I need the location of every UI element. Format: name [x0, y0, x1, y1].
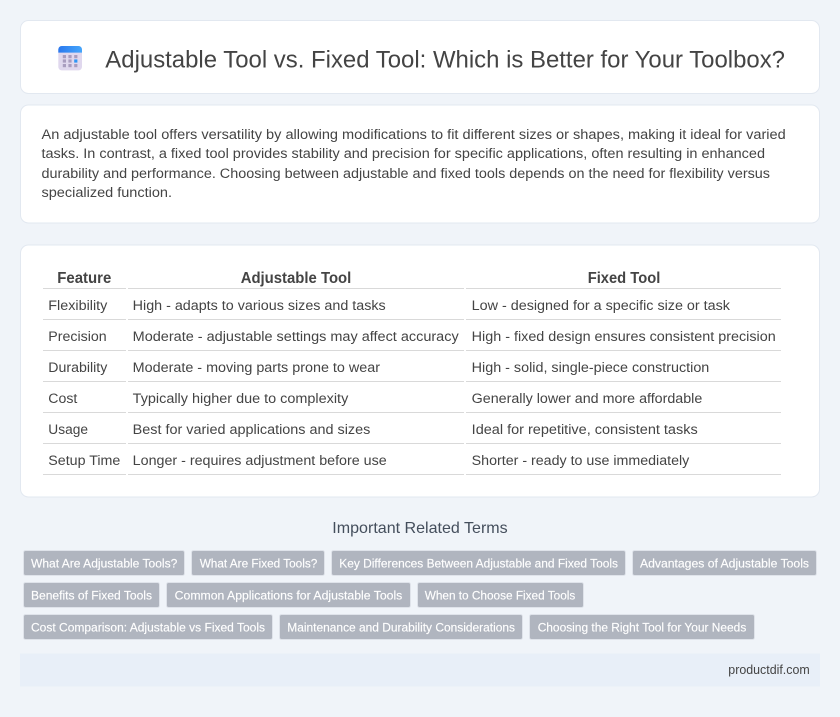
tag: [280, 614, 522, 640]
table header row: [43, 270, 781, 289]
table row: precision: Precision: [48, 329, 107, 345]
table row: setup time: Longer - requires adjustment before use: [133, 453, 387, 469]
tag: [24, 582, 160, 608]
panel: introduction: [20, 105, 820, 223]
table row: precision: High - fixed design ensures consistent precision: [472, 329, 776, 345]
text block: introduction paragraph: An adjustable tool offers versatility by allowing modifications to fit different sizes or shapes, making it ideal for varied: [42, 127, 786, 143]
table row: flexibility: [43, 298, 781, 320]
title: Adjustable Tool vs. Fixed Tool: Which is Better for Your Toolbox?: [105, 46, 785, 74]
table row: cost: [43, 391, 781, 413]
footer source text: productdif.com: [728, 662, 810, 677]
table row: usage: Usage: [48, 422, 88, 438]
table row: flexibility: High - adapts to various sizes and tasks: [133, 298, 386, 314]
table row: precision: [43, 329, 781, 351]
table row: durability: High - solid, single-piece construction: [472, 360, 709, 376]
icon: calendar: [58, 46, 82, 70]
panel: related term tags: [24, 550, 816, 640]
table row: usage: [43, 422, 781, 444]
table row: durability: Moderate - moving parts prone to wear: [133, 360, 380, 376]
table row: flexibility: Low - designed for a specific size or task: [472, 298, 731, 314]
tag: [192, 550, 324, 576]
table row: setup time: [43, 453, 781, 475]
tag: [332, 550, 626, 576]
tag: What Are Adjustable Tools?: [31, 556, 178, 570]
tag: [24, 614, 272, 640]
tag: [24, 550, 184, 576]
tag: Maintenance and Durability Considerations: [287, 620, 515, 634]
table row: usage: Ideal for repetitive, consistent tasks: [472, 422, 698, 438]
table row: durability: Durability: [48, 360, 108, 376]
tag: What Are Fixed Tools?: [200, 556, 318, 570]
text block: introduction paragraph: durability and performance. Choosing between adjustable and fixed tools depends on the need for flexibility versus: [42, 166, 770, 182]
tag: [632, 550, 816, 576]
tag: When to Choose Fixed Tools: [425, 588, 575, 602]
text block: introduction paragraph: tasks. In contrast, a fixed tool provides stability and precision for specific applications, often resulting in enhanced: [42, 146, 765, 162]
text block: introduction paragraph: specialized function.: [42, 185, 172, 201]
tag: Key Differences Between Adjustable and Fixed Tools: [339, 556, 618, 570]
tag: [530, 614, 754, 640]
tag: Choosing the Right Tool for Your Needs: [538, 620, 746, 634]
table row: cost: Cost: [48, 391, 77, 407]
tag: Advantages of Adjustable Tools: [640, 556, 809, 570]
tag: [166, 582, 410, 608]
heading: important related terms: Important Related Terms: [332, 520, 508, 537]
table row: cost: Generally lower and more affordable: [472, 391, 702, 407]
tag: Benefits of Fixed Tools: [31, 588, 152, 602]
tag: [418, 582, 584, 608]
table row: setup time: Setup Time: [48, 453, 120, 469]
tag: Common Applications for Adjustable Tools: [175, 588, 402, 602]
table row: flexibility: Flexibility: [48, 298, 108, 314]
table header row: Feature: [57, 270, 111, 287]
table row: cost: Typically higher due to complexity: [133, 391, 349, 407]
panel: title header: [20, 20, 820, 94]
text block: introduction paragraph: [42, 127, 786, 201]
table row: precision: Moderate - adjustable settings may affect accuracy: [133, 329, 460, 345]
table header row: Fixed Tool: [588, 270, 660, 287]
table header row: Adjustable Tool: [241, 270, 351, 287]
table row: setup time: Shorter - ready to use immediately: [472, 453, 690, 469]
tag: Cost Comparison: Adjustable vs Fixed Tools: [31, 620, 265, 634]
table row: usage: Best for varied applications and sizes: [133, 422, 370, 438]
panel: comparison table: [20, 245, 820, 497]
table row: durability: [43, 360, 781, 382]
footer: [20, 654, 820, 686]
